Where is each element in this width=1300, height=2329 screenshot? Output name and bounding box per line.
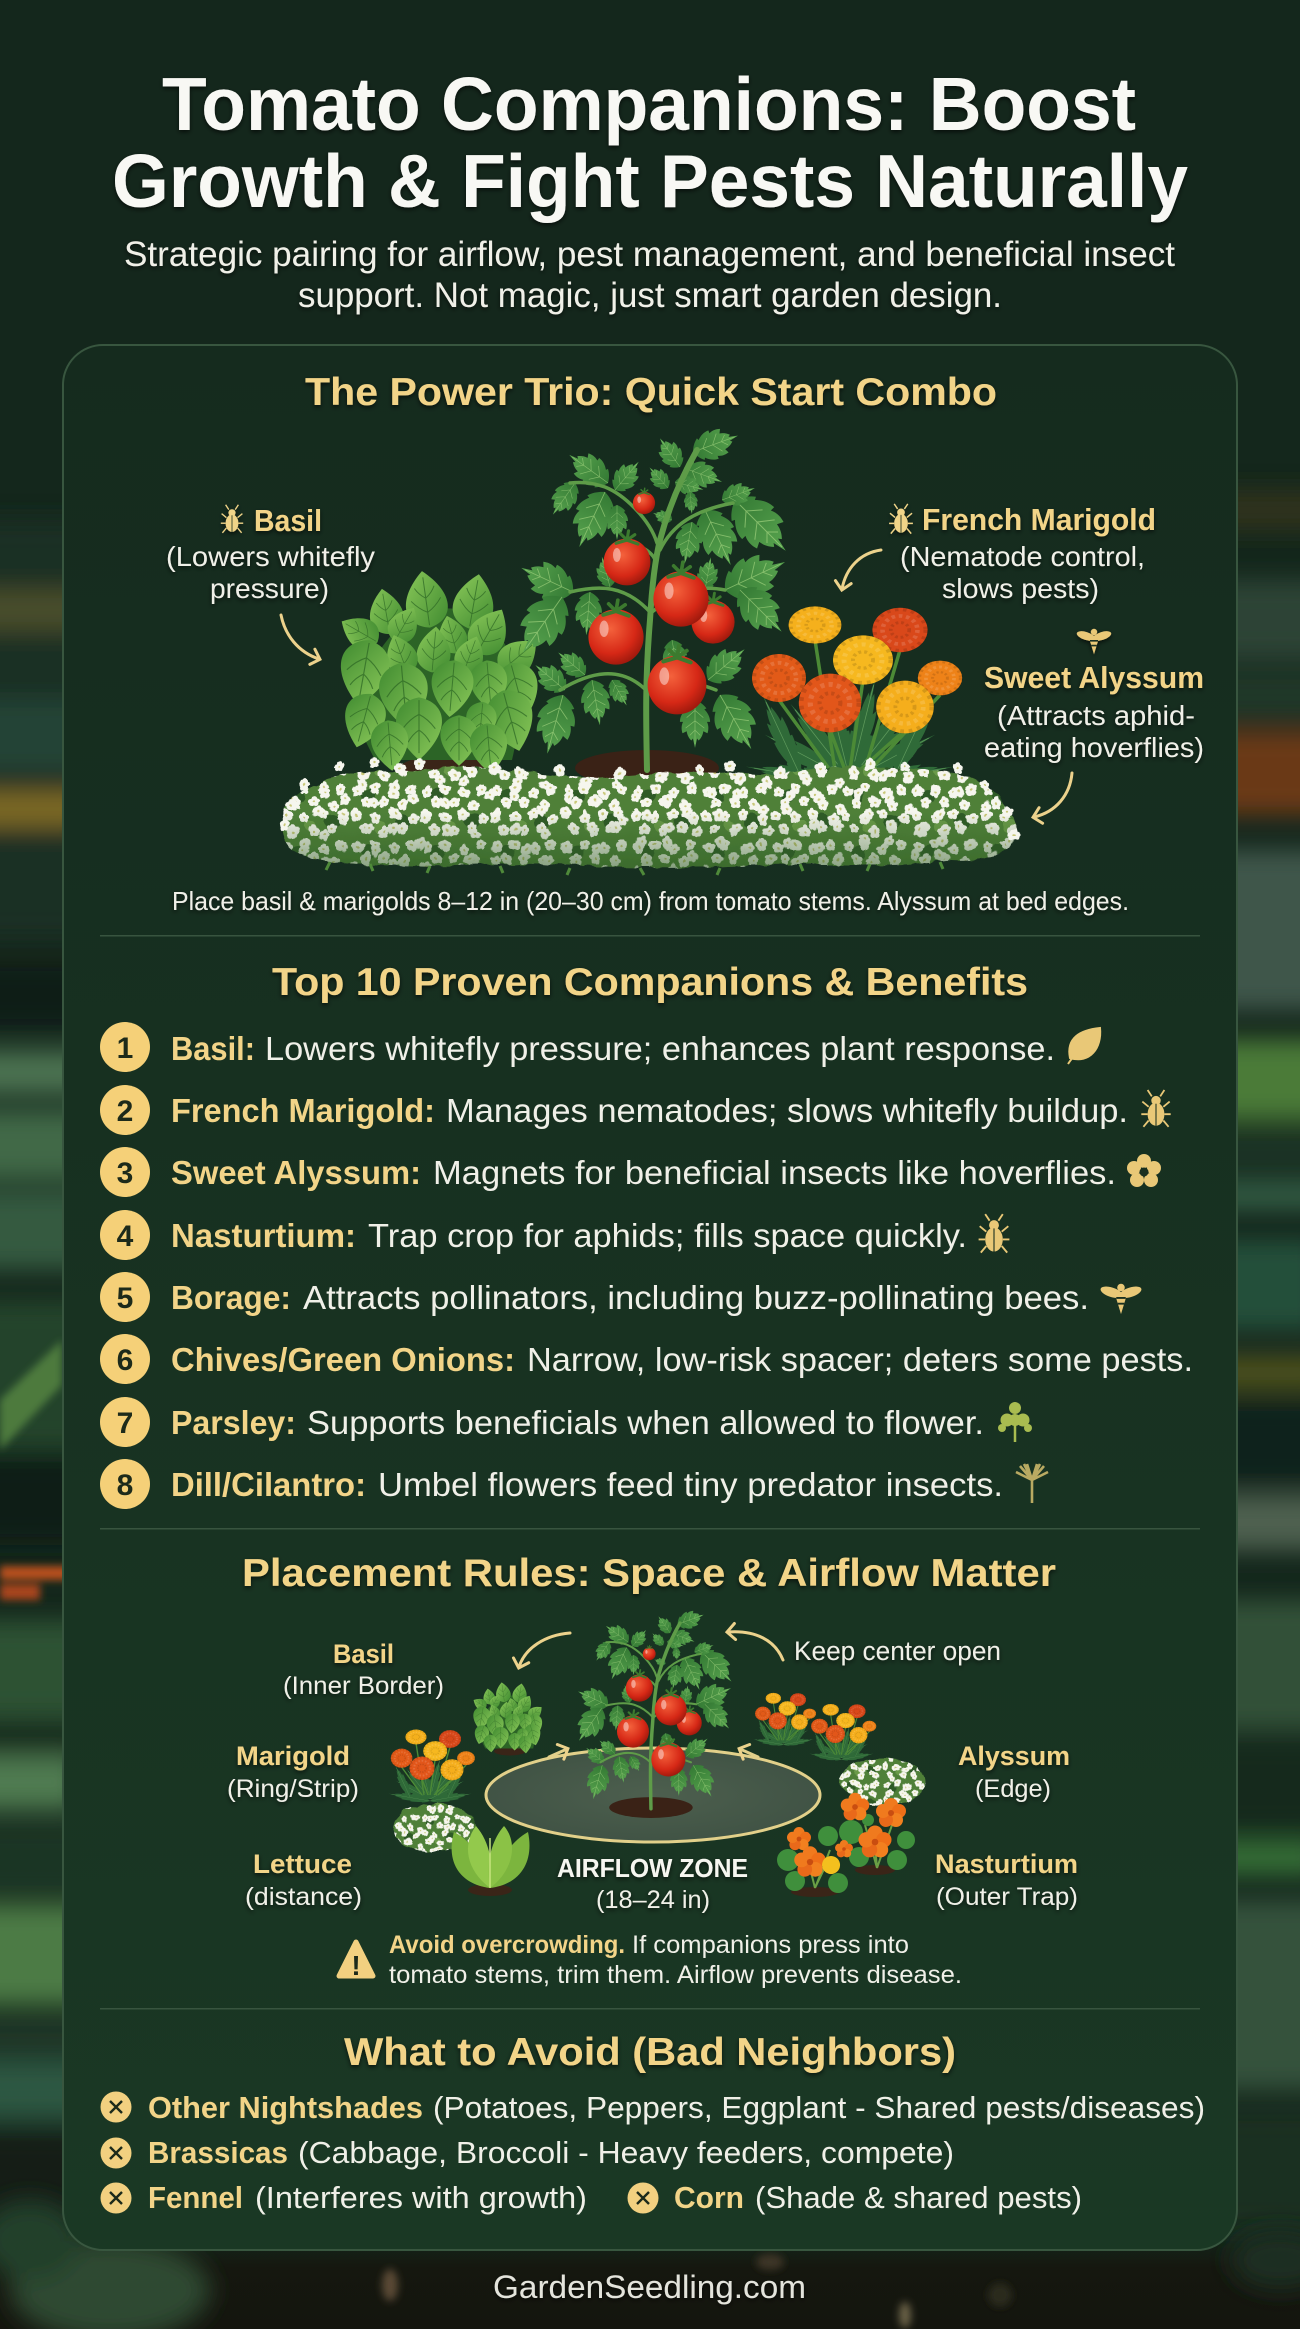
icon: small basil	[471, 1681, 545, 1756]
icon: small tomato plant	[569, 1607, 741, 1818]
callout: avoid overcrowding: tomato stems, trim them. Airflow prevents disease.	[389, 1961, 962, 1989]
icon: leaf	[1068, 1028, 1100, 1064]
label: basil: (Lowers whitefly	[166, 541, 375, 572]
list item 1	[100, 1022, 1100, 1072]
list item 3	[100, 1147, 1161, 1197]
title: Growth & Fight Pests Naturally	[112, 139, 1188, 223]
arrow: marigold	[842, 550, 881, 589]
arrow: ellipse right	[740, 1749, 758, 1757]
avoid item: nightshades: Other Nightshades	[148, 2090, 423, 2125]
label: sweet alyssum: Sweet Alyssum	[984, 660, 1204, 695]
label: basil	[166, 503, 375, 604]
footer: site name: GardenSeedling.com	[493, 2269, 806, 2305]
list item 3: Sweet Alyssum:	[171, 1154, 421, 1191]
icon: small marigold right 2	[809, 1704, 876, 1762]
list item 7: Parsley:	[171, 1404, 296, 1441]
icon: marigold bug	[889, 504, 913, 534]
icon: dill	[1016, 1464, 1048, 1503]
label: basil placement: Basil	[333, 1639, 394, 1669]
heading: power trio: The Power Trio: Quick Start Combo	[305, 371, 997, 414]
placement note: Place basil & marigolds 8–12 in (20–30 cm) from tomato stems. Alyssum at bed edges.	[172, 886, 1129, 916]
list item 2: French Marigold:	[171, 1092, 435, 1129]
list item 2	[100, 1085, 1171, 1135]
label: basil placement: (Inner Border)	[283, 1672, 444, 1700]
list item 7: 7	[117, 1407, 133, 1440]
label: lettuce placement: (distance)	[245, 1883, 362, 1911]
list item 6: 6	[117, 1344, 133, 1377]
label: sweet alyssum: (Attracts aphid-	[997, 700, 1195, 731]
arrow: alyssum	[1034, 773, 1072, 817]
icon: lettuce	[452, 1826, 529, 1896]
list item 4: 4	[117, 1220, 134, 1253]
label: basil placement	[283, 1639, 444, 1700]
label: nasturtium placement: Nasturtium	[935, 1849, 1078, 1879]
label: french marigold	[889, 502, 1156, 604]
label: marigold placement: Marigold	[236, 1741, 350, 1771]
section: top companions list	[100, 961, 1193, 1509]
icon: parsley	[998, 1402, 1032, 1442]
label: airflow zone: AIRFLOW ZONE	[557, 1853, 748, 1883]
list item 1: Lowers whitefly pressure; enhances plant response.	[265, 1030, 1055, 1067]
label: sweet alyssum	[984, 629, 1204, 763]
subtitle: Strategic pairing for airflow, pest management, and beneficial insect	[124, 235, 1175, 274]
label: keep center open: Keep center open	[794, 1636, 1001, 1666]
list item 4: Trap crop for aphids; fills space quickly.	[368, 1217, 967, 1254]
heading: what to avoid: What to Avoid (Bad Neighbors)	[344, 2031, 956, 2074]
list item 8: 8	[117, 1469, 133, 1502]
icon: nasturtium upper	[839, 1793, 915, 1875]
label: basil: pressure)	[210, 573, 329, 604]
arrow: keep center open	[728, 1632, 783, 1660]
avoid item: corn: (Shade & shared pests)	[755, 2180, 1082, 2215]
label: alyssum placement: (Edge)	[975, 1775, 1051, 1803]
list item 1: 1	[117, 1032, 133, 1065]
heading: top 10: Top 10 Proven Companions & Benefits	[272, 961, 1028, 1004]
avoid item: corn: Corn	[674, 2180, 744, 2215]
label: french marigold: slows pests)	[942, 573, 1099, 604]
icon: warning triangle: !	[351, 1950, 361, 1981]
list item 7	[100, 1397, 1032, 1447]
label: airflow zone	[557, 1853, 748, 1914]
diagram: airflow zone ellipse	[486, 1748, 820, 1842]
label: marigold placement: (Ring/Strip)	[227, 1775, 359, 1803]
list item 3: Magnets for beneficial insects like hoverflies.	[433, 1154, 1116, 1191]
arrow: to basil	[519, 1633, 570, 1667]
list item 5	[100, 1272, 1143, 1322]
list item 2: 2	[117, 1095, 133, 1128]
section: placement rules	[227, 1552, 1078, 1989]
label: airflow zone: (18–24 in)	[596, 1886, 710, 1914]
icon: small marigold right 1	[753, 1693, 816, 1747]
label: french marigold: French Marigold	[922, 502, 1156, 537]
callout: avoid overcrowding: Avoid overcrowding.	[389, 1931, 625, 1959]
arrow: basil	[281, 615, 319, 659]
label: alyssum placement: Alyssum	[958, 1741, 1070, 1771]
panel: main card	[63, 345, 1237, 2250]
icon: small marigold left	[388, 1730, 475, 1805]
icon: whitefly bug	[1141, 1090, 1171, 1127]
arrow: ellipse left	[549, 1749, 567, 1757]
label: sweet alyssum: eating hoverflies)	[984, 732, 1204, 763]
list item 5: 5	[117, 1282, 133, 1315]
section: what to avoid	[100, 2031, 1205, 2215]
label: basil: Basil	[254, 503, 322, 538]
icon: aphid	[979, 1214, 1009, 1253]
illustration: basil plant	[334, 568, 547, 780]
section: power trio	[166, 371, 1204, 916]
icon: basil beetle	[221, 505, 243, 533]
label: marigold placement	[227, 1741, 359, 1803]
list item 7: Supports beneficials when allowed to flower.	[307, 1404, 984, 1441]
illustration: marigold plant	[744, 606, 962, 794]
list item 8: Umbel flowers feed tiny predator insects.	[378, 1466, 1003, 1503]
label: lettuce placement	[245, 1849, 362, 1911]
callout: avoid overcrowding	[339, 1931, 962, 1989]
list item 8: Dill/Cilantro:	[171, 1466, 366, 1503]
label: lettuce placement: Lettuce	[253, 1849, 352, 1879]
list item 8	[100, 1459, 1048, 1509]
avoid item: fennel	[100, 2180, 587, 2215]
subtitle: support. Not magic, just smart garden design.	[298, 276, 1002, 315]
title	[112, 62, 1188, 223]
icon: alyssum bee	[1076, 629, 1112, 654]
label: nasturtium placement	[935, 1849, 1078, 1911]
icon: bee	[1099, 1284, 1143, 1314]
subtitle	[124, 235, 1175, 315]
heading: placement rules: Placement Rules: Space & Airflow Matter	[242, 1552, 1056, 1595]
list item 6	[100, 1334, 1193, 1384]
title: Tomato Companions: Boost	[162, 62, 1136, 146]
list item 6: Narrow, low-risk spacer; deters some pests.	[527, 1341, 1193, 1378]
list item 1: Basil:	[171, 1030, 255, 1067]
illustration: tomato plant	[505, 421, 802, 786]
list item 4: Nasturtium:	[171, 1217, 356, 1254]
icon: alyssum left	[393, 1804, 477, 1852]
icon: flower	[1127, 1154, 1161, 1187]
list item 5: Attracts pollinators, including buzz-pollinating bees.	[303, 1279, 1089, 1316]
label: alyssum placement	[958, 1741, 1070, 1803]
icon: nasturtium lower	[777, 1826, 853, 1897]
avoid item: nightshades	[100, 2090, 1205, 2125]
illustration: alyssum bed	[278, 756, 1020, 875]
avoid item: brassicas: Brassicas	[148, 2135, 288, 2170]
label: nasturtium placement: (Outer Trap)	[936, 1883, 1078, 1911]
callout: avoid overcrowding: If companions press into	[632, 1931, 909, 1959]
avoid item: fennel: (Interferes with growth)	[255, 2180, 587, 2215]
avoid item: nightshades: (Potatoes, Peppers, Eggplant - Shared pests/diseases)	[433, 2090, 1205, 2125]
list item 2: Manages nematodes; slows whitefly buildup.	[446, 1092, 1128, 1129]
list item 6: Chives/Green Onions:	[171, 1341, 515, 1378]
label: french marigold: (Nematode control,	[900, 541, 1145, 572]
list item 3: 3	[117, 1157, 133, 1190]
icon: warning triangle	[339, 1942, 373, 1981]
avoid item: fennel: Fennel	[148, 2180, 243, 2215]
list item 5: Borage:	[171, 1279, 291, 1316]
icon: alyssum right	[840, 1758, 926, 1806]
avoid item: brassicas: (Cabbage, Broccoli - Heavy feeders, compete)	[298, 2135, 954, 2170]
list item 4	[100, 1210, 1009, 1260]
